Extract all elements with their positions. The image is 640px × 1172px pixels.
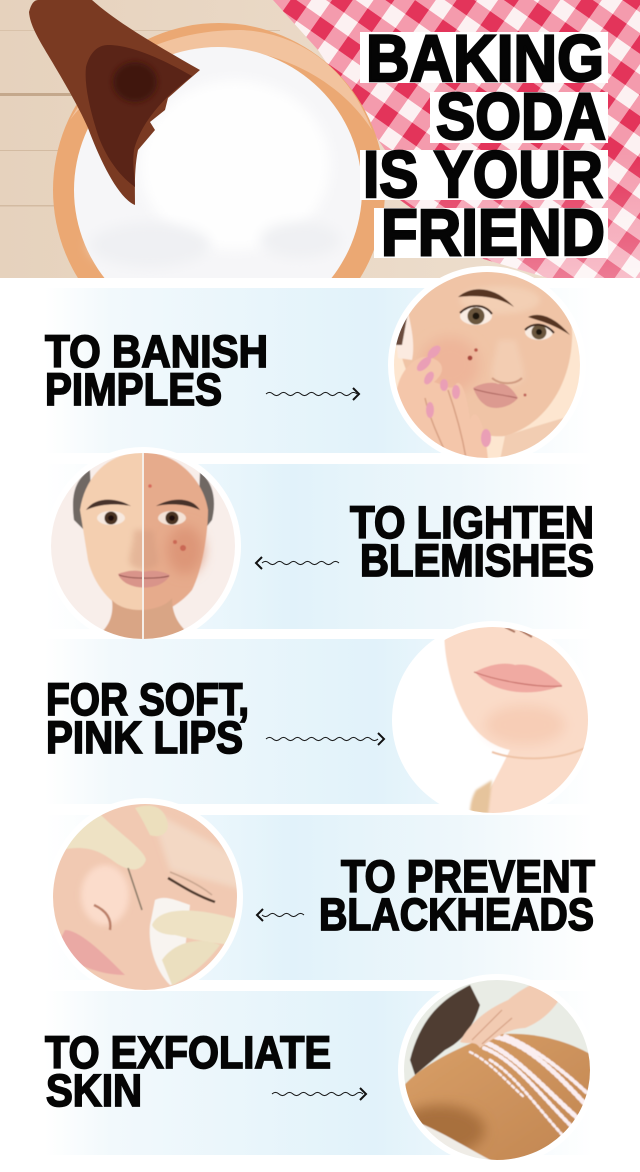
heading: to banish pimples: PIMPLES bbox=[45, 364, 222, 415]
title: baking soda is your friend: SODA bbox=[436, 79, 606, 153]
panel: to prevent blackheads bbox=[45, 798, 595, 996]
photo: salt scrub on back bbox=[398, 974, 590, 1160]
hand bbox=[460, 986, 558, 1048]
closed eye bbox=[168, 878, 215, 902]
heading: for soft pink lips: PINK LIPS bbox=[46, 712, 243, 763]
heading: to exfoliate skin: SKIN bbox=[46, 1065, 142, 1116]
arrow: left bbox=[257, 909, 304, 921]
hand with pink nails bbox=[396, 357, 488, 460]
baking soda powder bbox=[74, 47, 362, 278]
panel: to exfoliate skin bbox=[45, 974, 600, 1170]
nose bbox=[81, 865, 129, 925]
photo: face before and after bbox=[45, 447, 245, 645]
lips bbox=[55, 930, 125, 975]
hero photo: bowl of baking soda bbox=[0, 0, 640, 278]
photo: woman with pimples bbox=[388, 266, 590, 464]
heading: to prevent blackheads bbox=[319, 851, 595, 940]
panel: for soft pink lips bbox=[45, 620, 600, 820]
wooden spoon bbox=[29, 0, 200, 205]
wipe bbox=[150, 898, 190, 985]
gloved fingers bbox=[66, 816, 146, 870]
panel: to lighten blemishes bbox=[45, 447, 594, 645]
heading: to banish pimples bbox=[45, 326, 268, 415]
title: baking soda is your friend bbox=[360, 21, 608, 269]
arrow: right bbox=[272, 1088, 366, 1100]
terracotta bowl bbox=[53, 23, 385, 278]
heading: to prevent blackheads: TO PREVENT bbox=[341, 851, 595, 902]
panel: to banish pimples bbox=[45, 266, 590, 464]
heading: to lighten blemishes bbox=[350, 497, 594, 586]
heading: for soft pink lips: FOR SOFT, bbox=[46, 674, 249, 725]
salt bbox=[470, 1036, 586, 1138]
heading: to exfoliate skin bbox=[45, 1027, 331, 1116]
arrow: left bbox=[256, 557, 339, 569]
heading: to lighten blemishes: TO LIGHTEN bbox=[350, 497, 594, 548]
arrow: right bbox=[266, 733, 384, 745]
heading: for soft pink lips bbox=[46, 674, 249, 763]
heading: to lighten blemishes: BLEMISHES bbox=[360, 535, 594, 586]
heading: to prevent blackheads: BLACKHEADS bbox=[319, 889, 594, 940]
towel bbox=[422, 1123, 492, 1160]
arrow: right bbox=[266, 388, 359, 400]
photo: blackhead extraction bbox=[47, 798, 245, 996]
gingham cloth bbox=[273, 0, 640, 278]
title: baking soda is your friend: BAKING bbox=[366, 21, 604, 95]
photo: lips and chin bbox=[392, 621, 588, 813]
title: baking soda is your friend: IS YOUR bbox=[363, 137, 603, 211]
heading: to banish pimples: TO BANISH bbox=[45, 326, 268, 377]
heading: to exfoliate skin: TO EXFOLIATE bbox=[45, 1027, 331, 1078]
title: baking soda is your friend: FRIEND bbox=[381, 195, 605, 269]
